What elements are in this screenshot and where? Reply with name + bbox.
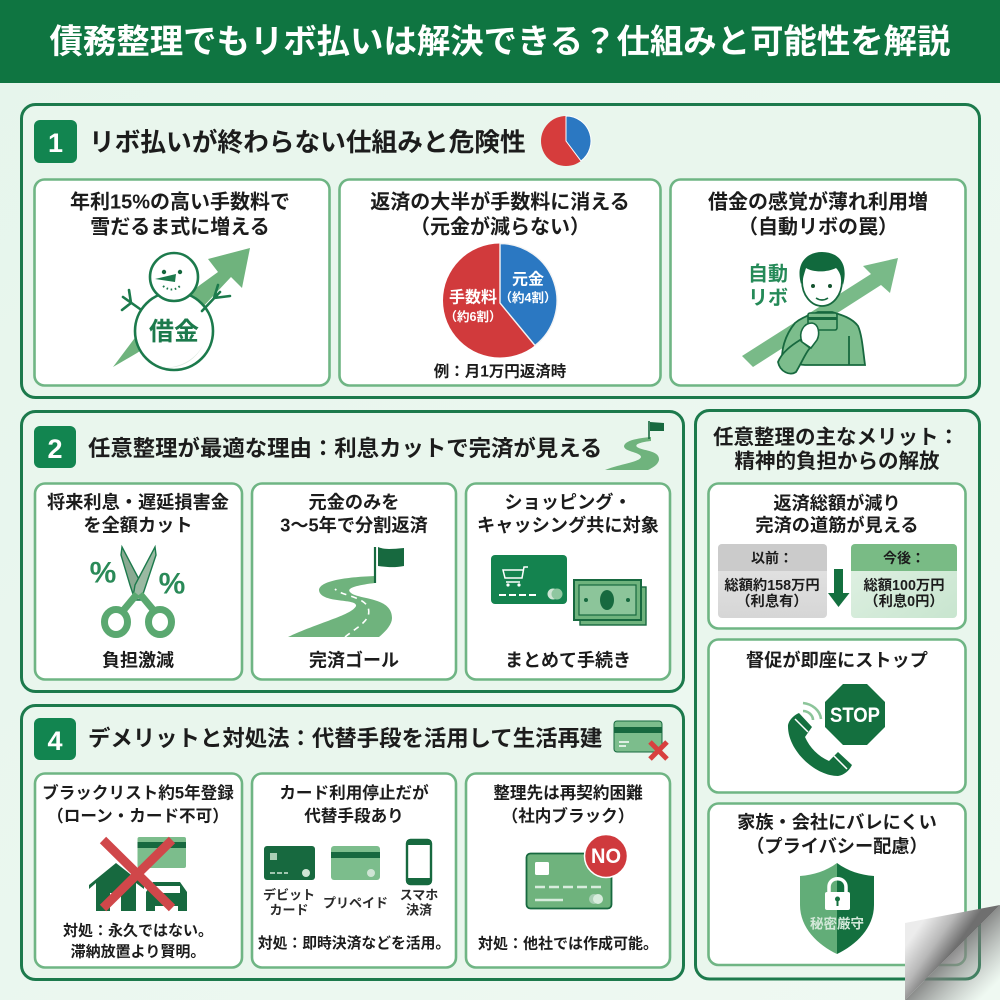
panel 4: デメリットと対処法 [22,706,684,980]
card: auto revolving trap [670,180,966,386]
card title: カード利用停止だが [279,783,429,803]
after box: （利息0円） [864,592,944,610]
icon: scissors: % [159,568,185,601]
card title: （プライバシー配慮） [746,836,928,856]
before box [718,544,827,618]
panel heading: 精神的負担からの解放 [734,450,940,473]
pie chart: 手数料 [449,288,497,307]
icon: smartphone: 決済 [406,902,432,917]
before box: （利息有） [736,592,808,610]
icon: smartphone: スマホ [400,887,438,902]
card: collection stops [708,640,966,792]
panel 2: 任意整理が最適な理由 [22,412,684,692]
after box [851,544,957,618]
card title: 返済総額が減り [773,492,901,513]
icon: stop sign: STOP [830,704,880,727]
icon: debit card: デビット [263,887,315,902]
card title: 将来利息・遅延損害金 [47,491,229,512]
label: auto revolving [748,262,788,309]
card title [42,783,234,826]
card: most repayment goes to fees [340,180,660,386]
card title: （ローン・カード不可） [47,807,229,826]
icon: snowman: 借金 [149,318,199,346]
pie chart [443,244,557,358]
card title: （自動リボの罠） [738,215,898,238]
card title [493,784,643,826]
badge 4: 4 [47,726,63,756]
icon: debit card: カード [269,902,309,917]
icon: shield with padlock [800,863,874,954]
title: 債務整理でもリボ払いは解決できる？仕組みと可能性を解説 [50,24,950,61]
heading 2: 任意整理が最適な理由：利息カットで完済が見える [88,435,602,461]
label: auto revolving: リボ [748,286,788,309]
card title [755,492,919,535]
icon: road and flag [605,421,664,470]
card note: 対処：永久ではない。 [63,922,213,940]
card: snowball fees [34,180,330,386]
card note [63,922,213,961]
icon: small pie [541,116,591,166]
badge 2: 2 [47,434,63,464]
card: privacy [708,804,966,965]
badge 4 [34,718,76,760]
icon: prepaid card [323,846,388,910]
card title: 返済の大半が手数料に消える [370,189,630,213]
card title [47,491,229,535]
icon: scissors [90,547,185,634]
card: cut future interest [35,484,242,680]
label: auto revolving: 自動 [748,262,788,285]
card: shopping and cashing [466,484,670,680]
header banner [0,0,1000,83]
card title [737,811,937,856]
icon: scissors: % [90,557,116,590]
panel: main merits [696,410,980,979]
card title: ブラックリスト約5年登録 [42,783,234,803]
card caption: 負担激減 [102,649,174,670]
card: re-contract difficult [466,774,670,968]
card title: 元金のみを [309,492,399,512]
card title: 完済の道筋が見える [755,514,919,535]
card: repay principal in 3-5 years [252,484,456,680]
panel 1: リボ払いの仕組みと危険性 [22,104,980,398]
icon: road to goal flag [288,547,404,637]
card title: 3〜5年で分割返済 [280,514,428,535]
icon: debit card [263,846,315,917]
icon: credit card with NO stamp [526,834,628,908]
heading 4: デメリットと対処法：代替手段を活用して生活再建 [88,725,602,751]
icon: arrow behind snowman [113,248,250,367]
card caption: 完済ゴール [309,649,399,670]
icon: shield with padlock: 秘密厳守 [810,915,864,931]
icon: stop sign [825,684,885,745]
icon: prepaid card: プリペイド [323,895,388,910]
card title [477,491,659,535]
card: blacklist [35,774,242,968]
card title: （社内ブラック） [502,806,634,826]
icon: telephone [788,703,852,776]
card note: 滞納放置より賢明。 [71,943,205,961]
before box: 以前： [751,550,793,566]
arrow down [828,569,850,607]
before box: 総額約158万円 [724,576,820,594]
badge 1 [34,120,77,163]
card: total repayment reduced [708,484,966,628]
card title: 年利15%の高い手数料で [70,190,290,213]
card title: 整理先は再契約困難 [493,784,643,803]
card title [70,190,290,238]
badge 1: 1 [48,128,63,158]
card title [279,783,429,826]
after box: 今後： [883,550,925,566]
badge 2 [34,426,76,468]
card title [370,189,630,238]
card title [280,492,428,535]
panel heading [713,426,959,473]
card: alternatives [252,774,456,968]
icon: smartphone [400,840,438,917]
icon: house, car and card crossed out [89,837,187,911]
icon: snowman [122,253,230,370]
after box: 総額100万円 [863,576,945,594]
card title: 督促が即座にストップ [746,649,928,670]
icon: credit card with NO stamp: NO [591,845,621,868]
card note: 対処：他社では作成可能。 [478,935,658,953]
icon: shopping card [491,555,567,604]
heading 1: リボ払いが終わらない仕組みと危険性 [89,127,526,157]
icon: rising arrow [742,258,898,367]
panel heading: 任意整理の主なメリット： [713,426,959,449]
card title: を全額カット [83,515,193,535]
card title: 家族・会社にバレにくい [737,811,937,832]
icon: banknotes [574,580,646,625]
card caption: まとめて手続き [505,649,631,670]
card title: ショッピング・ [504,491,632,512]
card note: 対処：即時決済などを活用。 [258,934,450,952]
icon: person with card [778,252,865,374]
card title: 雪だるま式に増える [90,215,270,238]
pie chart: （約4割） [500,290,556,305]
card title: 代替手段あり [304,806,404,826]
card title: 借金の感覚が薄れ利用増 [708,189,928,213]
pie chart: 元金 [512,270,544,289]
chart note: 例：月1万円返済時 [434,363,567,381]
card title: キャッシング共に対象 [477,514,659,535]
page curl [905,905,1000,1000]
pie chart: （約6割） [445,309,501,324]
card title [708,189,928,238]
icon: card with red cross [614,721,667,759]
card title: （元金が減らない） [410,214,590,238]
